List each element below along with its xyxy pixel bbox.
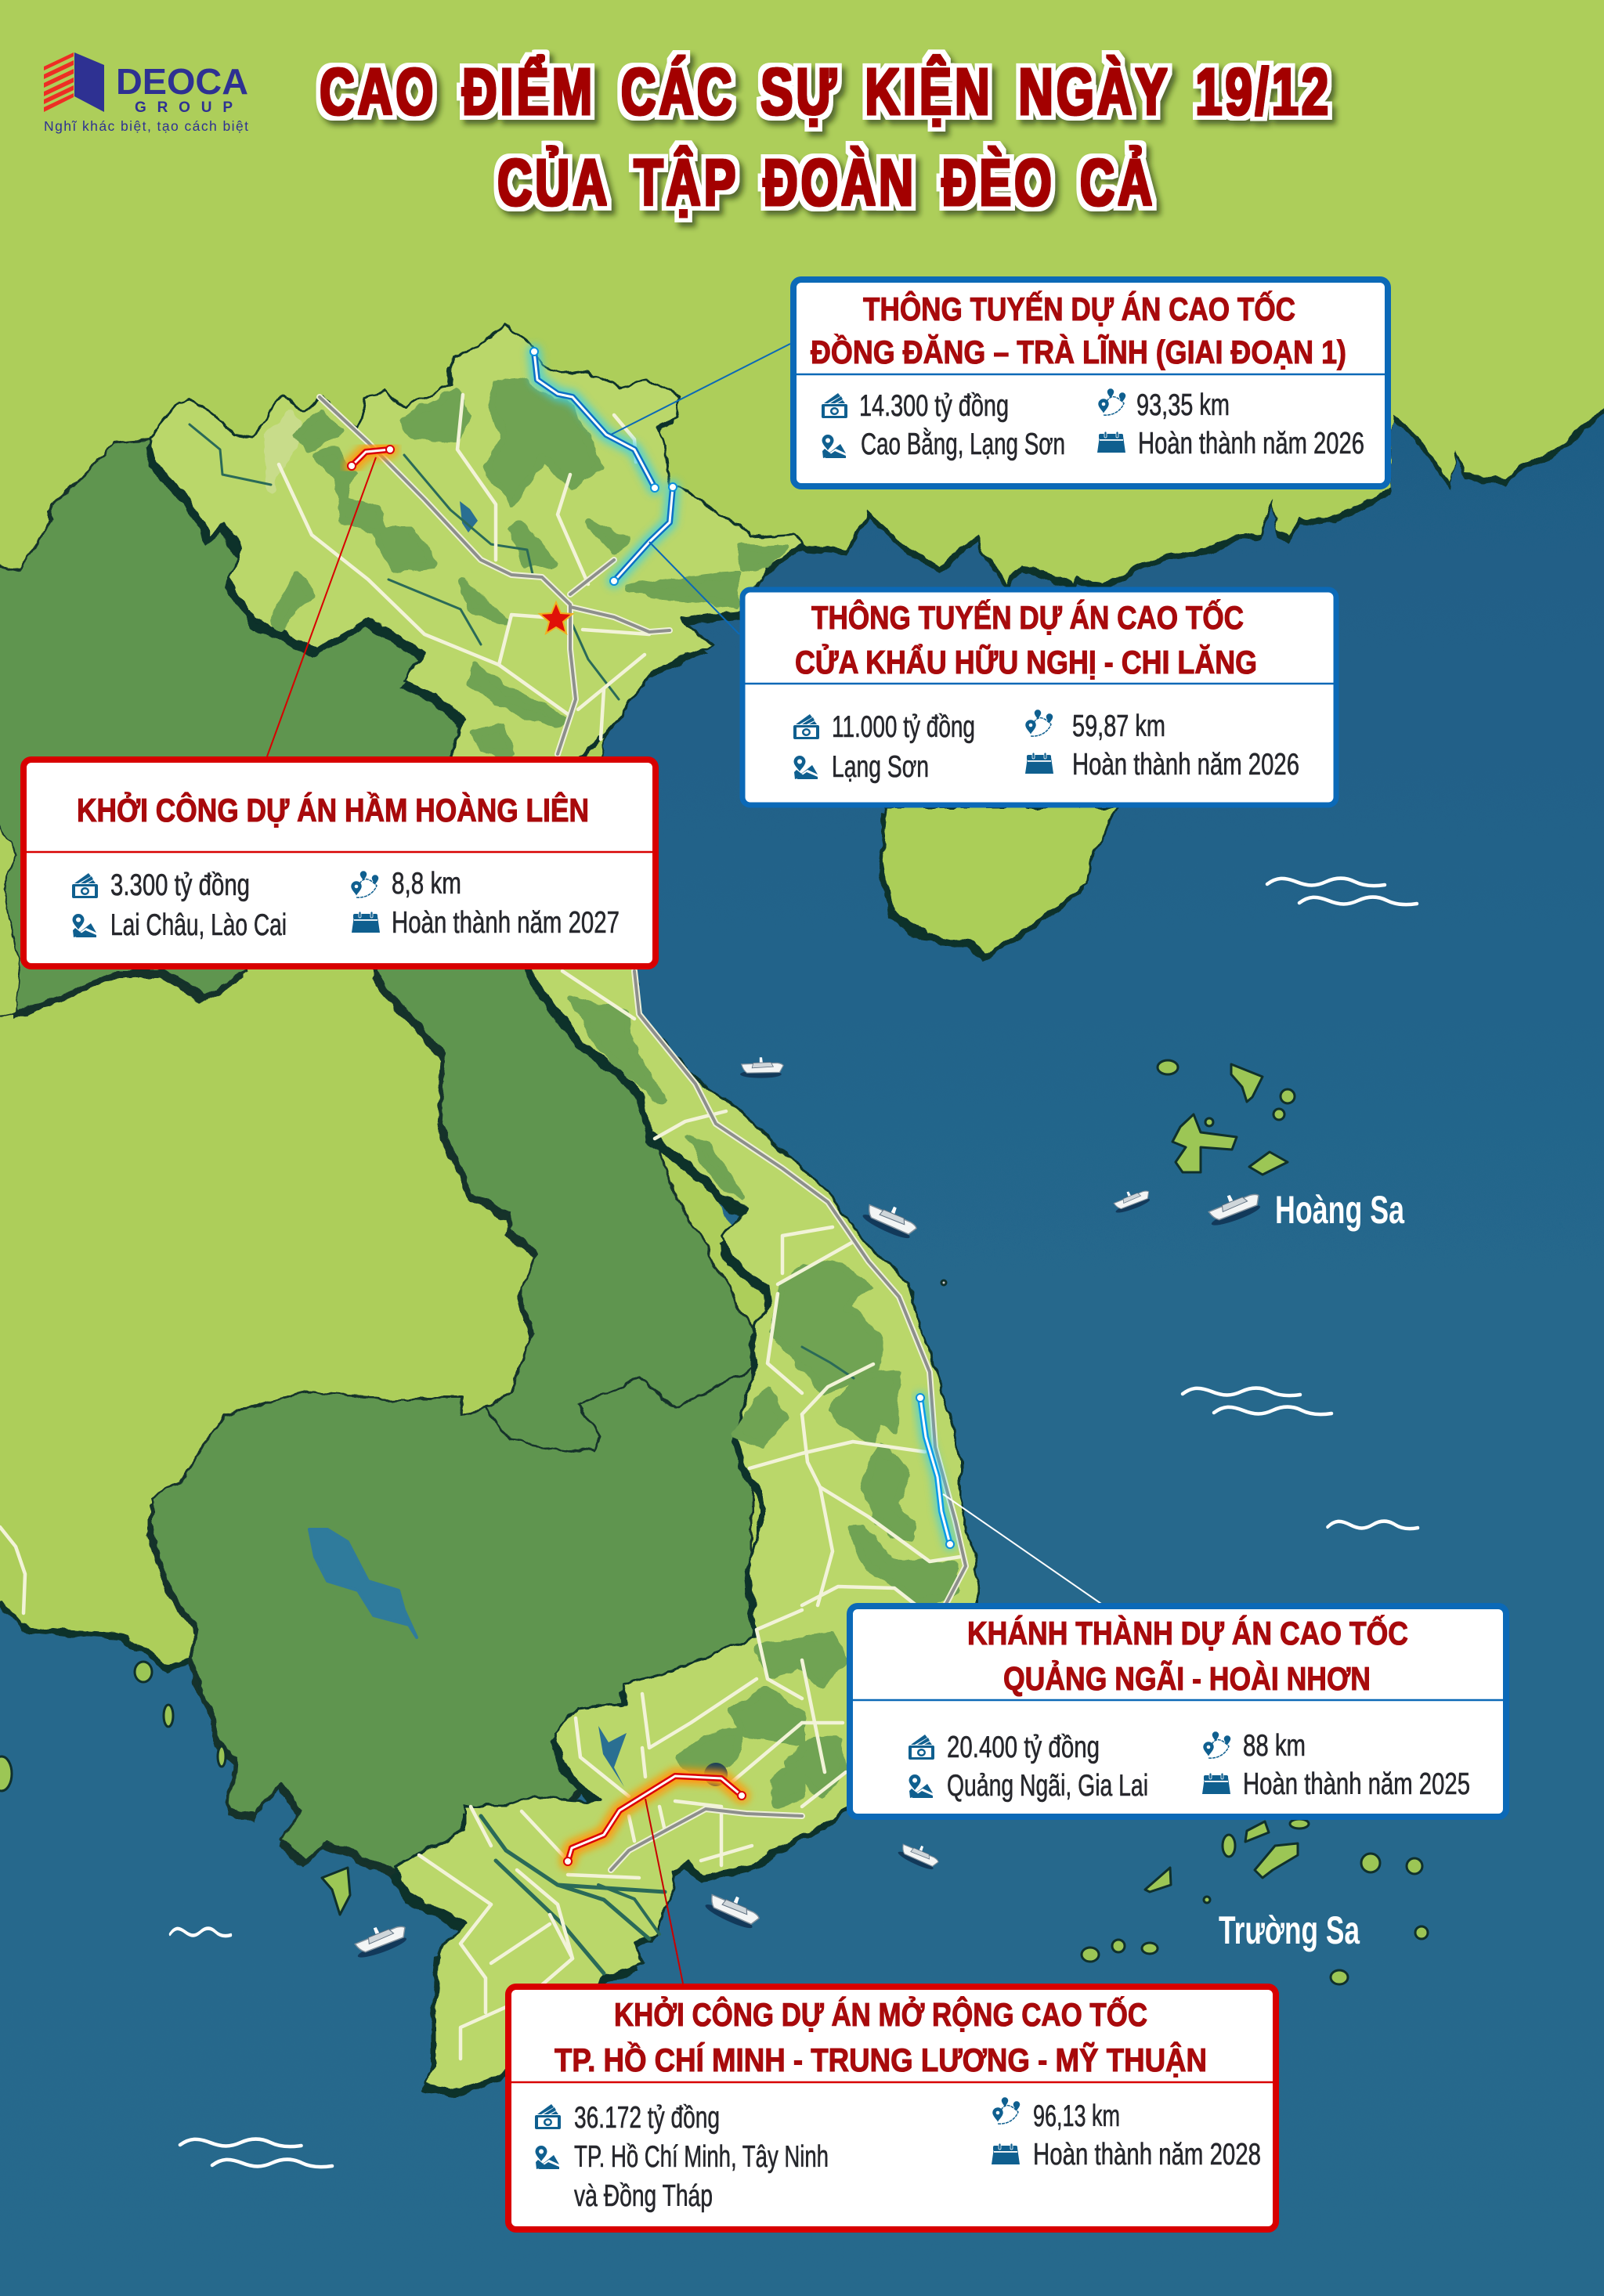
panel: TP. HCM - Trung Lương - Mỹ Thuận: và Đồng Tháp: [574, 2179, 713, 2213]
panel: TP. HCM - Trung Lương - Mỹ Thuận: TP. Hồ Chí Minh, Tây Ninh: [574, 2140, 829, 2174]
panel: Hầm Hoàng Liên: Lai Châu, Lào Cai: [110, 908, 287, 942]
panel: Hầm Hoàng Liên: 3.300 tỷ đồng: [110, 868, 250, 902]
title: [320, 55, 1331, 219]
expressways: [320, 397, 966, 1870]
panel: Hầm Hoàng Liên: [23, 760, 656, 966]
label: Hoàng Sa: Hoàng Sa: [1275, 1188, 1405, 1232]
panel: TP. HCM - Trung Lương - Mỹ Thuận: 36.172 tỷ đồng: [574, 2101, 720, 2135]
panel: Quảng Ngãi - Hoài Nhơn: Hoàn thành năm 2025: [1243, 1767, 1470, 1801]
panel: TP. HCM - Trung Lương - Mỹ Thuận: [508, 1987, 1276, 2229]
panel: Hữu Nghị - Chi Lăng: THÔNG TUYẾN DỰ ÁN CAO TỐC: [811, 598, 1244, 636]
Hainan island: [880, 807, 1120, 962]
panel: Hữu Nghị - Chi Lăng: Hoàn thành năm 2026: [1072, 748, 1299, 782]
panel: Quảng Ngãi - Hoài Nhơn: QUẢNG NGÃI - HOÀI NHƠN: [1003, 1659, 1371, 1697]
route: Hầm Hoàng Liên: [348, 446, 394, 470]
panel: Đồng Đăng - Trà Lĩnh: Hoàn thành năm 2026: [1138, 427, 1364, 460]
panel: Hữu Nghị - Chi Lăng: [742, 590, 1336, 805]
panel: Hầm Hoàng Liên: KHỞI CÔNG DỰ ÁN HẦM HOÀNG LIÊN: [77, 791, 589, 829]
white local roads: [279, 395, 960, 2059]
leader lines: [267, 344, 1104, 1984]
islands: Gulf of Thailand: [0, 1662, 350, 1915]
waves: [170, 879, 1418, 2167]
Tonle Sap lake: [309, 1529, 417, 1637]
rivers: [190, 424, 854, 1973]
islands: Trường Sa: [1082, 1819, 1428, 1984]
panel: TP. HCM - Trung Lương - Mỹ Thuận: 96,13 km: [1033, 2099, 1120, 2133]
panel: Hầm Hoàng Liên: 8,8 km: [392, 867, 461, 901]
route: Quảng Ngãi - Hoài Nhơn: [916, 1394, 954, 1548]
lakes: [460, 501, 728, 1787]
title: CỦA TẬP ĐOÀN ĐÈO CẢ: [497, 146, 1155, 219]
panel: Đồng Đăng - Trà Lĩnh: Cao Bằng, Lạng Sơn: [861, 428, 1065, 461]
panel: TP. HCM - Trung Lương - Mỹ Thuận: Hoàn thành năm 2028: [1033, 2138, 1261, 2171]
panel: Hữu Nghị - Chi Lăng: 59,87 km: [1072, 709, 1165, 743]
icon: capital star: [540, 602, 573, 634]
panel: Hữu Nghị - Chi Lăng: 11.000 tỷ đồng: [832, 710, 975, 744]
route: TP. HCM - Trung Lương - Mỹ Thuận: [564, 1776, 746, 1865]
panel: Đồng Đăng - Trà Lĩnh: [793, 280, 1388, 486]
ships: [351, 1057, 1264, 1961]
panel: Quảng Ngãi - Hoài Nhơn: KHÁNH THÀNH DỰ ÁN CAO TỐC: [967, 1614, 1408, 1652]
Thailand west road: [0, 1527, 25, 1613]
panel: Quảng Ngãi - Hoài Nhơn: [850, 1606, 1506, 1817]
panel: Hầm Hoàng Liên: Hoàn thành năm 2027: [392, 906, 620, 940]
panel: TP. HCM - Trung Lương - Mỹ Thuận: KHỞI CÔNG DỰ ÁN MỞ RỘNG CAO TỐC: [614, 1995, 1147, 2033]
panel: TP. HCM - Trung Lương - Mỹ Thuận: TP. HỒ CHÍ MINH - TRUNG LƯƠNG - MỸ THUẬN: [555, 2041, 1207, 2078]
route: Hữu Nghị - Chi Lăng: [610, 483, 677, 585]
Vietnam land: [144, 325, 978, 2099]
logo: Nghĩ khác biệt, tạo cách biệt: [44, 118, 248, 134]
panel: Quảng Ngãi - Hoài Nhơn: Quảng Ngãi, Gia Lai: [947, 1769, 1148, 1803]
panel: Hữu Nghị - Chi Lăng: CỬA KHẨU HỮU NGHỊ - CHI LĂNG: [795, 643, 1257, 680]
panel: Đồng Đăng - Trà Lĩnh: ĐỒNG ĐĂNG – TRÀ LĨNH (GIAI ĐOẠN 1): [811, 333, 1346, 370]
logo: GROUP: [135, 99, 233, 116]
label: Trường Sa: Trường Sa: [1219, 1908, 1360, 1952]
logo: DEOCA: [116, 61, 248, 102]
panel: Đồng Đăng - Trà Lĩnh: THÔNG TUYẾN DỰ ÁN CAO TỐC: [863, 290, 1295, 327]
panel: Hữu Nghị - Chi Lăng: Lạng Sơn: [832, 750, 929, 784]
logo: [44, 52, 248, 134]
panel: Quảng Ngãi - Hoài Nhơn: 88 km: [1243, 1729, 1306, 1763]
panel: Quảng Ngãi - Hoài Nhơn: 20.400 tỷ đồng: [947, 1731, 1100, 1764]
Laos and Cambodia land: [0, 439, 757, 1879]
forest patches: [266, 380, 956, 1807]
route: Đồng Đăng - Trà Lĩnh: [530, 348, 659, 492]
panel: Đồng Đăng - Trà Lĩnh: 93,35 km: [1136, 388, 1230, 422]
islands: Hoàng Sa: [941, 1060, 1295, 1285]
panel: Đồng Đăng - Trà Lĩnh: 14.300 tỷ đồng: [859, 389, 1009, 423]
